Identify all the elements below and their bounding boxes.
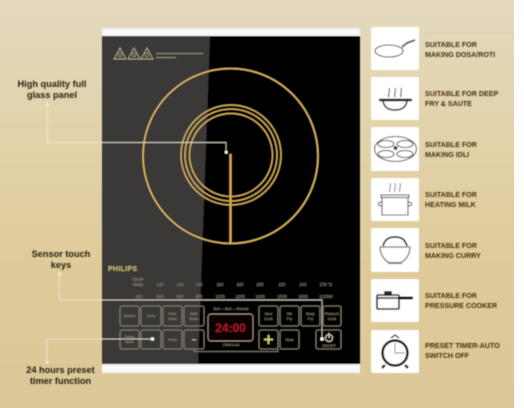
leader: sensor touch keys	[58, 272, 324, 340]
bottom white trim	[102, 363, 360, 373]
label: timer function: timer function	[30, 376, 92, 386]
control keys: ON/OFF	[322, 344, 337, 348]
temperature and power scale: 180	[236, 282, 244, 287]
temperature and power scale: 600	[176, 294, 184, 299]
function labels above and below display: Boil — Boil — Reheat	[214, 307, 248, 311]
top white trim	[102, 27, 360, 37]
control keys: Milk/	[190, 312, 198, 316]
temperature and power scale: 240	[300, 282, 307, 287]
feature: deep fry: FRY & SAUTE	[425, 100, 472, 108]
temperature and power scale: 270 °C	[320, 282, 332, 287]
glass reflection	[102, 36, 210, 364]
temperature and power scale: 1800	[298, 294, 308, 299]
display: 24:00	[215, 321, 246, 335]
control keys: Dosa	[168, 317, 177, 321]
control keys: ━━	[191, 338, 197, 342]
feature: idli: SUITABLE FOR	[425, 141, 477, 149]
temperature and power scale	[132, 277, 333, 299]
temperature and power scale: 160	[216, 282, 224, 287]
temperature and power scale: 1600	[277, 294, 287, 299]
power icon	[326, 333, 332, 342]
brand: PHILIPS	[108, 266, 137, 273]
feature: idli: MAKING IDLI	[425, 151, 469, 159]
icon: alarm clock	[382, 335, 408, 368]
temperature and power scale: 140	[196, 282, 203, 287]
temperature and power scale: 1000	[215, 294, 225, 299]
icon: wok with steam	[379, 88, 412, 110]
black glass panel	[102, 36, 360, 364]
feature: deep fry	[371, 77, 498, 120]
temperature and power scale: 1400	[255, 294, 265, 299]
temperature and power scale: 1200	[235, 294, 245, 299]
feature: heating milk: SUITABLE FOR	[425, 191, 477, 199]
feature: timer: PRESET TIMER-AUTO	[425, 342, 500, 350]
feature: timer: SWITCH OFF	[425, 352, 470, 360]
control keys: Work	[125, 340, 134, 344]
temperature and power scale: TEMP	[132, 277, 144, 282]
control keys: Fry	[308, 317, 313, 321]
feature: timer	[371, 330, 500, 373]
control keys: Manual	[124, 314, 136, 318]
feature: dosa/roti: MAKING DOSA/ROTI	[425, 51, 495, 59]
control keys	[120, 306, 341, 349]
icon: idli plate	[374, 136, 416, 162]
control keys: Stir	[287, 312, 293, 316]
control keys: Slow	[265, 312, 273, 316]
icon: pan	[375, 40, 415, 57]
control keys: Fry	[287, 317, 292, 321]
temperature and power scale: 200	[256, 282, 264, 287]
feature: heating milk	[371, 178, 477, 221]
control keys: Cook	[264, 317, 273, 321]
control keys: Delay	[125, 335, 134, 339]
feature: dosa/roti	[371, 27, 495, 70]
temperature and power scale: 120	[156, 282, 164, 287]
control keys: Deep	[306, 312, 315, 316]
label: high quality glass panel: glass panel	[27, 90, 77, 100]
feature: pressure cooker: PRESSURE COOKER	[425, 302, 497, 310]
temperature and power scale: 2100W	[319, 294, 333, 299]
control keys: Heat	[286, 338, 293, 342]
label: sensor touch keys: Sensor touch	[32, 249, 91, 259]
display	[208, 314, 253, 341]
induction cooktop: Child Lock	[223, 343, 240, 347]
icon: curry bowl	[380, 237, 410, 263]
feature: idli	[371, 127, 477, 171]
label: high quality glass panel: High quality full	[18, 79, 86, 89]
temperature and power scale: 220	[278, 282, 286, 287]
leader: timer function	[45, 338, 154, 364]
control keys: Timer	[168, 338, 178, 342]
control keys: Curry	[147, 314, 156, 318]
heating zone rings	[143, 68, 318, 244]
warning text	[156, 53, 203, 58]
control keys: Water	[189, 317, 200, 321]
temperature and power scale: 120	[176, 282, 184, 287]
feature: dosa/roti: SUITABLE FOR	[425, 41, 477, 49]
feature: deep fry: SUITABLE FOR DEEP	[425, 90, 498, 98]
leader: full glass panel	[46, 102, 228, 154]
temperature and power scale: 800	[196, 294, 203, 299]
icon: pressure cooker	[377, 292, 413, 309]
feature: pressure cooker	[371, 279, 497, 322]
icon: pot with steam	[378, 183, 412, 215]
warning icons	[114, 48, 153, 59]
temperature and power scale: 120	[136, 294, 143, 299]
feature: pressure cooker: SUITABLE FOR	[425, 292, 477, 300]
feature: heating milk: HEATING MILK	[425, 201, 477, 209]
temperature and power scale: 300	[156, 294, 164, 299]
feature: curry: MAKING CURRY	[425, 252, 481, 260]
label: timer function: 24 hours preset	[26, 365, 95, 375]
control keys: Roti/	[169, 312, 176, 316]
control keys: Cook	[328, 317, 336, 321]
induction cooktop	[102, 27, 360, 373]
temperature and power scale: Watts	[133, 282, 143, 287]
label: sensor touch keys: keys	[51, 260, 71, 270]
plus key glyph	[264, 335, 273, 344]
feature: curry: SUITABLE FOR	[425, 242, 477, 250]
control keys: Pressure	[325, 312, 339, 316]
feature: curry	[371, 228, 481, 272]
